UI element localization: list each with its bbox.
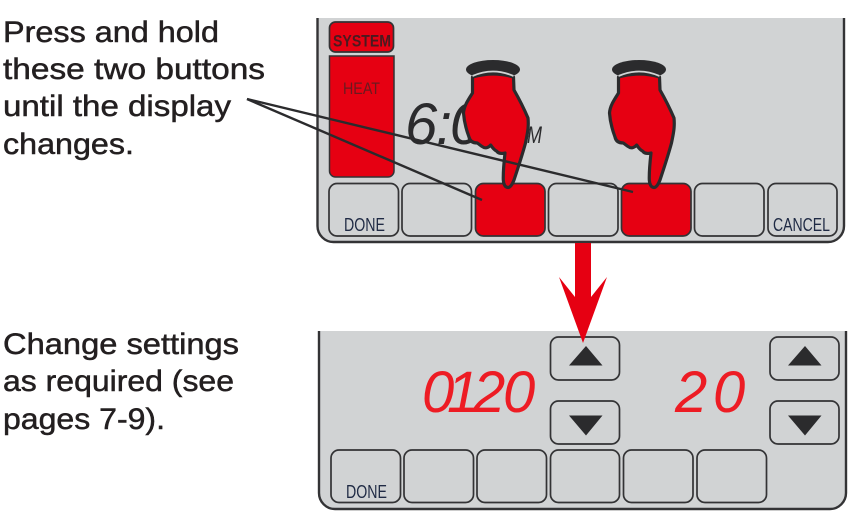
- instruction text: change settings: [3, 328, 239, 436]
- icon: left pressing hand: [464, 60, 528, 188]
- instruction text: press and hold: changes.: [3, 128, 134, 161]
- red readout: 0120: 0120: [422, 360, 535, 425]
- instruction text: press and hold: until the display: [3, 90, 231, 123]
- instruction text: change settings: as required (see: [3, 365, 234, 398]
- icon: right pressing hand: [610, 60, 674, 188]
- button: system: [330, 22, 394, 52]
- red readout: 20: 20: [674, 360, 745, 425]
- soft button: done: DONE: [346, 482, 387, 502]
- soft button: blank 2: [402, 184, 472, 236]
- panel: thermostat screen, bottom: [319, 331, 846, 509]
- soft button: blank 5: [624, 450, 693, 502]
- instruction text: press and hold: [3, 16, 265, 161]
- clock display: AM: [514, 122, 542, 149]
- soft button: blank 3: [477, 450, 546, 502]
- button: down arrow, centre: [550, 401, 620, 444]
- soft button: blank 6: [694, 184, 764, 236]
- instruction text: press and hold: Press and hold: [3, 16, 219, 49]
- soft button: done: [331, 450, 400, 502]
- soft button: blank 6: [697, 450, 766, 502]
- soft button: blank 4: [548, 184, 618, 236]
- instruction text: change settings: pages 7-9).: [3, 403, 165, 436]
- button: down arrow, right: [770, 401, 839, 444]
- leader lines from text to buttons: [247, 99, 633, 200]
- panel: thermostat screen, top: [318, 18, 844, 242]
- button: up arrow, right: [770, 337, 839, 380]
- soft button: cancel: CANCEL: [773, 215, 830, 235]
- panel: heat mode: HEAT: [343, 79, 380, 98]
- instruction text: change settings: Change settings: [3, 328, 239, 361]
- soft button: cancel: [768, 184, 837, 236]
- soft button: done: DONE: [344, 215, 385, 235]
- panel: heat mode: [330, 56, 394, 177]
- soft button: blank 2: [404, 450, 474, 502]
- button: system: SYSTEM: [333, 32, 391, 50]
- soft button: pressed right: [622, 184, 691, 236]
- clock display: 6:00: [405, 92, 514, 157]
- arrow: red down arrow between screens: [559, 243, 607, 343]
- soft button: blank 4: [550, 450, 620, 502]
- button: up arrow, centre: [550, 337, 620, 380]
- soft button: pressed left: [476, 184, 545, 236]
- soft button: done: [329, 184, 398, 236]
- instruction text: press and hold: these two buttons: [3, 53, 265, 86]
